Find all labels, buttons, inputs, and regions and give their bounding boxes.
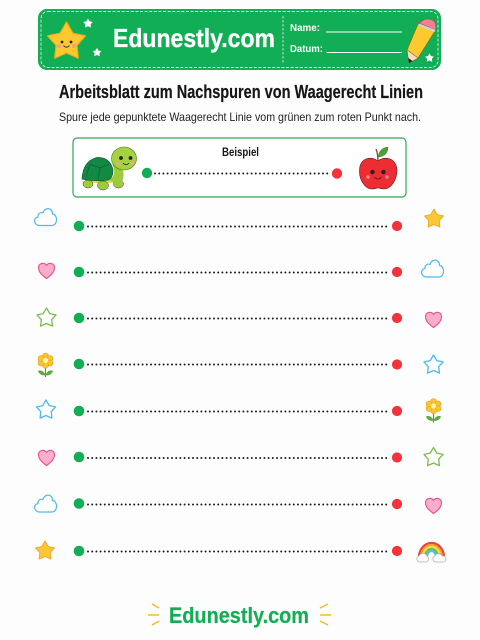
dotted line	[88, 550, 390, 552]
end dot	[392, 406, 402, 416]
dotted line	[88, 272, 390, 274]
end dot	[392, 546, 402, 556]
icon: small white stars	[83, 18, 101, 56]
example heading: Beispiel	[222, 145, 259, 159]
icon: blue cloud	[35, 495, 56, 512]
row 6	[38, 448, 443, 466]
name field: Name:	[290, 22, 320, 34]
row 2	[38, 260, 444, 278]
divider	[282, 16, 284, 63]
icon: apple	[359, 147, 397, 189]
icon: blue star outline	[424, 355, 443, 373]
icon: pink heart	[38, 450, 54, 466]
icon: blue star outline	[36, 400, 56, 418]
icon: green star outline	[37, 308, 56, 326]
icon: pencil sparkle	[425, 53, 434, 62]
icon: yellow star	[36, 541, 54, 559]
footer brand name: Edunestly.com	[169, 603, 309, 628]
row 5	[36, 398, 441, 422]
end dot	[392, 267, 402, 277]
icon: turtle	[82, 147, 136, 190]
icon: blue cloud	[35, 209, 56, 226]
row 7	[35, 495, 441, 514]
header banner	[38, 9, 441, 70]
dotted line	[88, 318, 390, 320]
footer logo	[148, 603, 331, 628]
start dot	[74, 452, 84, 462]
start dot	[74, 406, 84, 416]
icon: smiling star	[48, 22, 86, 58]
start dot	[74, 359, 84, 369]
date field	[290, 43, 402, 55]
name field	[290, 22, 402, 34]
icon: pink heart	[426, 498, 442, 514]
icon: pink heart	[38, 263, 54, 278]
icon: yellow star	[424, 209, 444, 227]
dotted line	[88, 504, 390, 506]
icon: flower	[38, 353, 53, 377]
dotted line	[88, 457, 390, 459]
row 1	[35, 209, 443, 231]
brand name: Edunestly.com	[113, 23, 275, 53]
row 3	[37, 308, 442, 328]
start dot	[74, 267, 84, 277]
icon: left rays	[148, 604, 159, 625]
start dot	[74, 498, 84, 509]
end dot	[392, 221, 402, 231]
start dot	[74, 313, 84, 323]
icon: pink heart	[426, 312, 442, 328]
icon: right rays	[320, 604, 331, 625]
end dot	[392, 313, 402, 323]
end dot	[392, 452, 402, 463]
icon: flower	[426, 398, 441, 422]
dotted line	[88, 226, 390, 228]
row 8	[36, 541, 446, 562]
icon: green star outline	[424, 448, 443, 466]
icon: pencil	[407, 19, 436, 63]
end dot	[332, 168, 342, 179]
dotted line	[88, 410, 390, 412]
start dot	[142, 168, 152, 178]
dotted line	[155, 172, 329, 174]
date field: Datum:	[290, 43, 323, 55]
subtitle: Spure jede gepunktete Waagerecht Linie vom grünen zum roten Punkt nach.	[59, 110, 421, 124]
dotted line	[88, 364, 390, 366]
end dot	[392, 359, 402, 370]
start dot	[74, 221, 84, 231]
start dot	[74, 546, 84, 556]
icon: rainbow	[417, 543, 446, 562]
end dot	[392, 499, 402, 509]
icon: blue cloud	[422, 260, 444, 277]
row 4	[38, 353, 443, 377]
panel: example	[73, 138, 406, 197]
